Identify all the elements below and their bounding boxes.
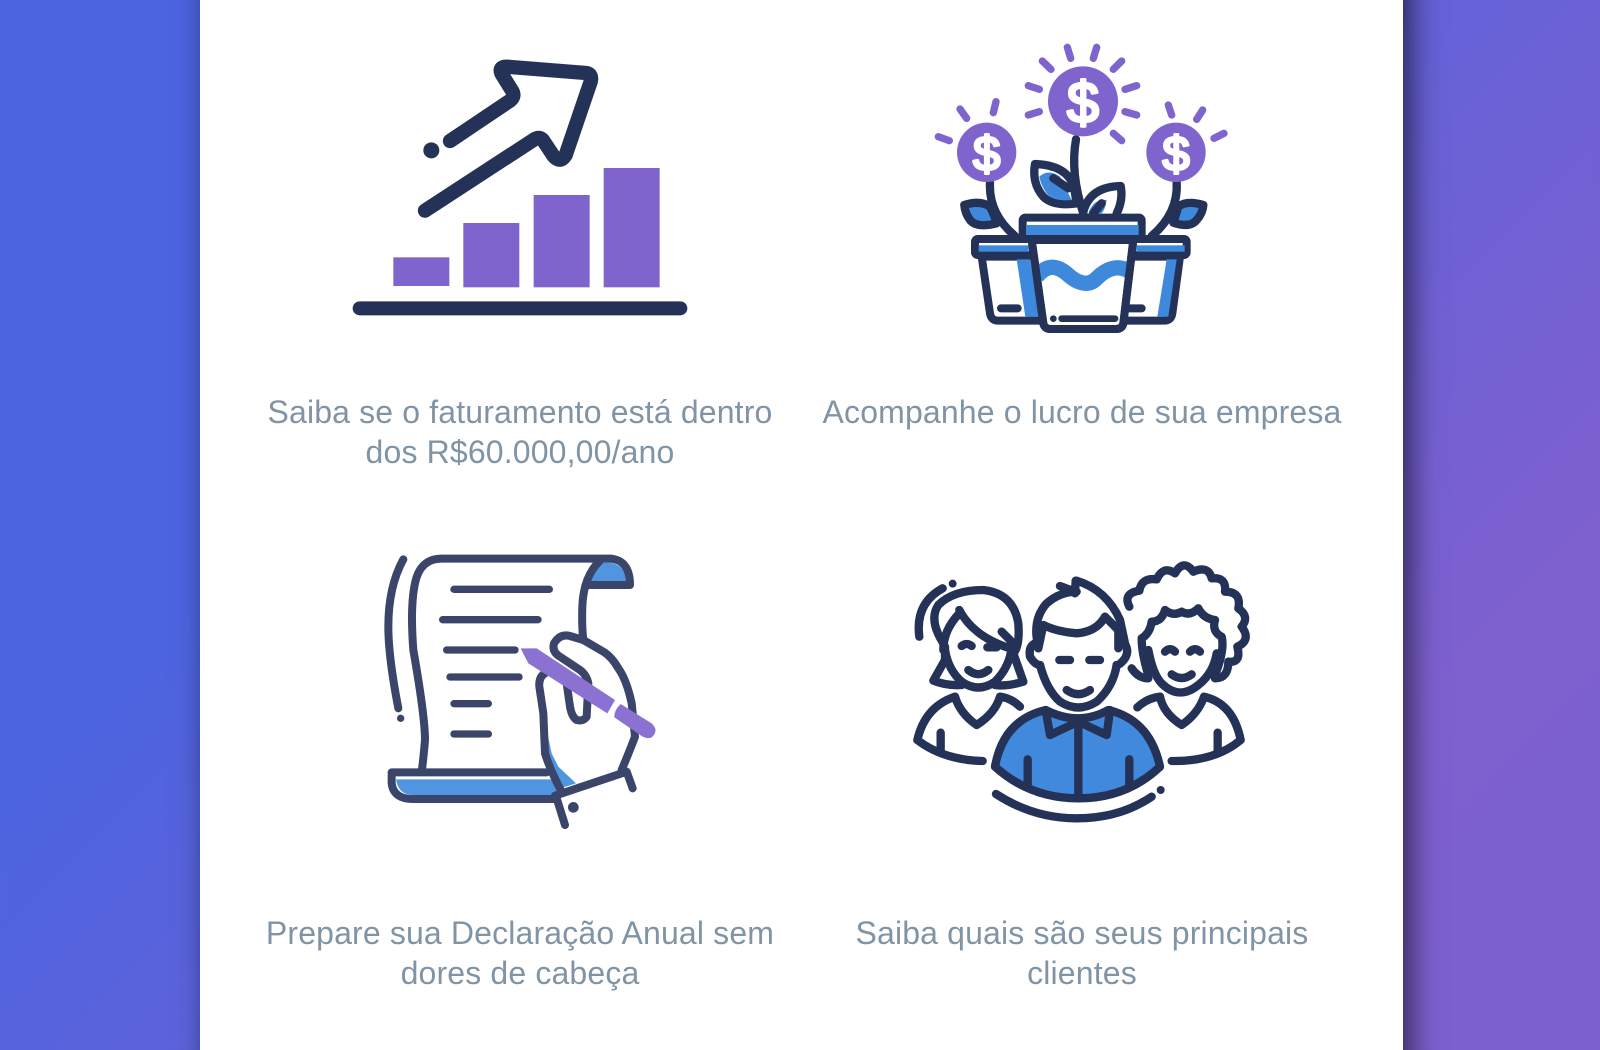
writing lines xyxy=(443,589,549,734)
icon: document with writing hand xyxy=(384,554,656,829)
paper base xyxy=(396,779,560,795)
cuff xyxy=(555,772,633,825)
right woman xyxy=(1127,565,1246,761)
caption: faturamento: dos R$60.000,00/ano xyxy=(366,434,674,470)
caption: declaração xyxy=(266,915,774,991)
caption: lucro: Acompanhe o lucro de sua empresa xyxy=(823,394,1341,430)
rays xyxy=(938,47,1224,141)
icon: group of three people xyxy=(913,561,1250,822)
hand shade xyxy=(547,730,576,787)
center man xyxy=(995,581,1165,818)
hand xyxy=(583,640,635,770)
caption: clientes: clientes xyxy=(1027,955,1137,991)
motion line xyxy=(388,559,403,708)
central pot xyxy=(1023,218,1142,329)
stems and leaves xyxy=(964,139,1203,236)
caption: declaração: dores de cabeça xyxy=(401,955,639,991)
caption: faturamento xyxy=(268,394,772,470)
left woman xyxy=(917,580,1023,761)
coins: $ xyxy=(1162,127,1190,181)
coins: $ xyxy=(1067,71,1099,135)
right pot xyxy=(1123,239,1187,321)
coins: $ xyxy=(973,127,1000,181)
paper edges xyxy=(412,559,610,772)
pen xyxy=(521,648,656,738)
coins xyxy=(957,66,1206,182)
arrow xyxy=(423,67,591,211)
bars xyxy=(393,168,660,287)
caption: clientes xyxy=(856,915,1308,991)
curl xyxy=(590,563,627,583)
icon: growth chart with arrow xyxy=(352,60,688,316)
caption: faturamento: Saiba se o faturamento está dentro xyxy=(268,394,772,430)
baseline xyxy=(353,301,687,315)
caption: declaração: Prepare sua Declaração Anual sem xyxy=(266,915,774,951)
caption: clientes: Saiba quais são seus principais xyxy=(856,915,1308,951)
left pot xyxy=(975,239,1042,321)
panel: white card xyxy=(200,0,1403,1050)
icon: money plants xyxy=(934,44,1228,333)
